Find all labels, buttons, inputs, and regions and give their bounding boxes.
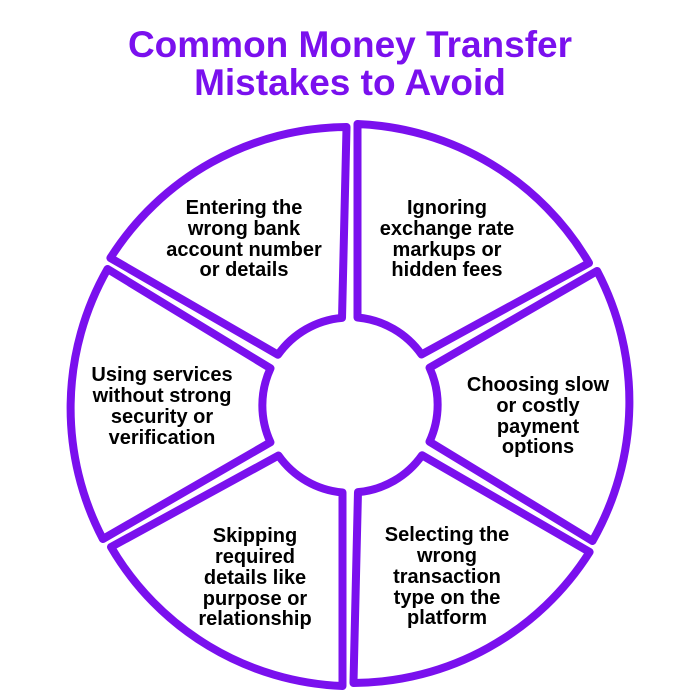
text: transaction type: platform [407,607,487,629]
text: transaction type [385,524,509,629]
text: bank account: wrong bank [187,218,301,240]
text: bank account: account number [166,239,322,261]
segment: transaction type [274,437,590,700]
text: payment options: or costly [496,395,581,417]
text: payment options: options [502,436,574,458]
text: required details: details like [204,567,306,589]
title: Mistakes to Avoid [194,62,506,103]
text: required details: required [215,546,295,568]
segment: bank account [110,58,426,373]
text: exchange rate: Ignoring [407,197,487,219]
text: required details [198,525,312,630]
text: bank account: or details [200,259,288,281]
segment: security [0,223,303,539]
text: transaction type: Selecting the [385,524,509,546]
segment: required details [111,456,342,686]
title [128,24,572,103]
text: bank account [166,197,322,281]
text: security: without strong [92,385,231,407]
text: exchange rate [380,197,514,281]
text: required details: relationship [198,608,312,630]
text: required details: Skipping [213,525,297,547]
segment: payment options [397,271,700,587]
text: transaction type: wrong [416,545,477,567]
text: transaction type: transaction [393,566,501,588]
text: payment options [467,374,610,458]
text: payment options: payment [497,416,579,438]
text: security [91,364,233,449]
text: payment options: Choosing slow [467,374,610,396]
title: Common Money Transfer [128,24,572,65]
text: exchange rate: exchange rate [380,218,514,240]
text: exchange rate: markups or [393,239,502,261]
text: security: verification [109,427,215,449]
segment: exchange rate [358,124,589,354]
text: security: security or [111,406,213,428]
text: security: Using services [91,364,233,386]
text: required details: purpose or [203,588,307,610]
text: exchange rate: hidden fees [391,259,503,281]
text: transaction type: type on the [394,587,500,609]
text: bank account: Entering the [186,197,302,219]
